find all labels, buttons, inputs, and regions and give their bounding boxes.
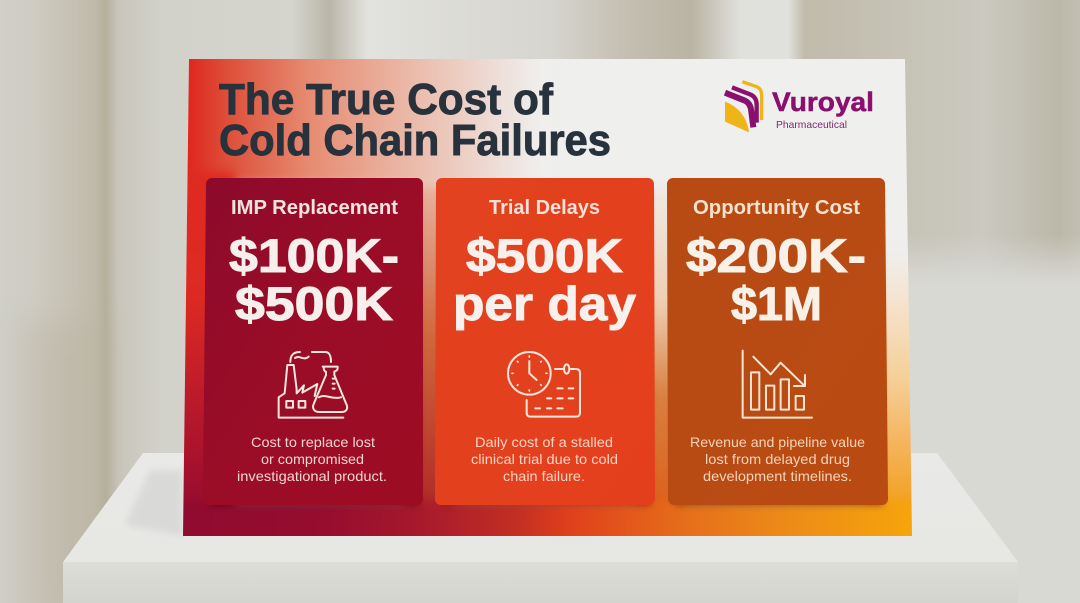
big number: per day (453, 277, 636, 330)
description: Cost to replace lost (251, 435, 375, 450)
panel: Opportunity Cost (673, 184, 883, 505)
description (471, 435, 618, 484)
big number (686, 229, 866, 330)
description: Revenue and pipeline value (690, 435, 865, 450)
icon: declining bar chart (743, 351, 812, 418)
panel: IMP Replacement (209, 184, 418, 505)
icon: factory and flask (279, 352, 347, 418)
description: development timelines. (703, 469, 852, 484)
title (219, 75, 611, 165)
big number (229, 229, 399, 330)
pedestal (63, 453, 1018, 603)
logo: Vuroyal Pharmaceutical: Pharmaceutical (776, 119, 847, 131)
description: investigational product. (237, 469, 387, 484)
icon: clock and calendar (508, 352, 580, 417)
logo: Vuroyal Pharmaceutical (725, 82, 874, 132)
icon: logo mark (725, 82, 762, 132)
title: Cold Chain Failures (219, 116, 611, 165)
logo: Vuroyal Pharmaceutical: Vuroyal (772, 87, 874, 117)
description (237, 435, 387, 484)
big number (453, 229, 636, 330)
title: The True Cost of (219, 75, 553, 124)
big number: $500K (466, 229, 623, 282)
description (690, 435, 865, 484)
description: clinical trial due to cold (471, 452, 618, 467)
description: lost from delayed drug (705, 452, 850, 467)
panel: Trial Delays (441, 184, 650, 505)
heading: Opportunity Cost (693, 197, 860, 219)
description: Daily cost of a stalled (475, 435, 613, 450)
big number: $200K- (686, 229, 866, 282)
description: chain failure. (503, 469, 585, 484)
big number: $100K- (229, 229, 399, 282)
big number: $1M (731, 277, 822, 330)
heading: Trial Delays (489, 197, 600, 219)
poster (183, 59, 912, 536)
description: or compromised (261, 452, 364, 467)
heading: IMP Replacement (231, 197, 398, 219)
big number: $500K (235, 277, 393, 330)
